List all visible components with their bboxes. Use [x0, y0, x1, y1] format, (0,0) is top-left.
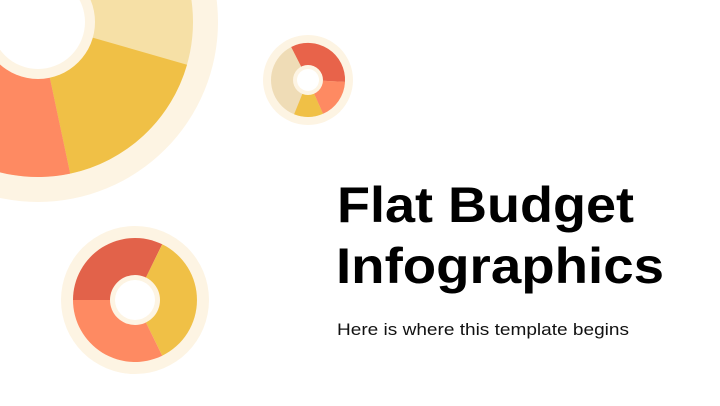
title: Infographics [336, 238, 664, 294]
donut: medium bottom-left [61, 226, 209, 374]
donut: small top [263, 35, 353, 125]
title: Flat Budget [337, 177, 634, 233]
donut: large top-left [0, 0, 218, 202]
subtitle: Here is where this template begins [337, 320, 629, 339]
title [336, 177, 664, 294]
